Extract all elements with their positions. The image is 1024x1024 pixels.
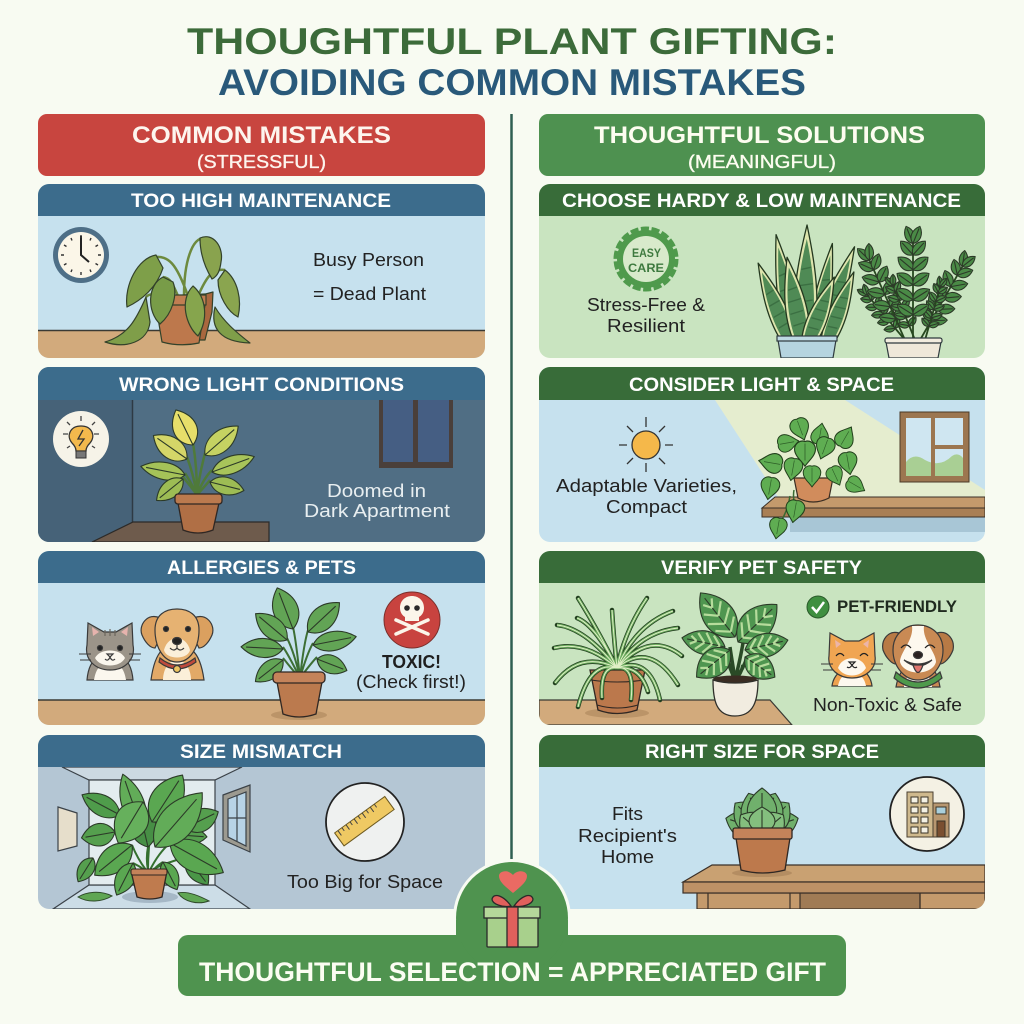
header: choose hardy: CHOOSE HARDY & LOW MAINTENANCE (562, 191, 961, 212)
column header: common mistakes: (STRESSFUL) (197, 152, 326, 172)
header: right size: RIGHT SIZE FOR SPACE (645, 742, 879, 763)
banner text: THOUGHTFUL SELECTION = APPRECIATED GIFT (199, 957, 826, 987)
text: fits recipient's home (578, 804, 677, 867)
illustration: spider plant (554, 598, 682, 718)
header: consider light: CONSIDER LIGHT & SPACE (629, 375, 894, 396)
label: pet-friendly: PET-FRIENDLY (837, 597, 958, 616)
text: fits recipient's home: Home (601, 847, 654, 867)
illustration: prayer plant (680, 583, 791, 716)
text: adaptable varieties (556, 476, 737, 517)
badge: easy care: EASY (632, 246, 661, 260)
text: toxic warning (356, 652, 466, 692)
header: verify pet safety (539, 551, 985, 583)
text: fits recipient's home: Recipient's (578, 826, 677, 846)
text: toxic warning: TOXIC! (382, 652, 441, 672)
text: busy person: = Dead Plant (313, 284, 426, 304)
icon: tan dog (141, 609, 213, 680)
header: allergies and pets: ALLERGIES & PETS (167, 558, 356, 579)
icon: light bulb (53, 411, 109, 467)
window: dark (379, 400, 453, 468)
panel: too high maintenance (38, 184, 485, 358)
text: doomed (304, 481, 450, 521)
column header: common mistakes: COMMON MISTAKES (132, 122, 391, 149)
icon: ruler (326, 783, 404, 861)
header: wrong light conditions: WRONG LIGHT CONDITIONS (119, 375, 404, 396)
illustration: wilted plant (105, 237, 250, 345)
title: THOUGHTFUL PLANT GIFTING: (187, 21, 837, 62)
text: doomed: Dark Apartment (304, 501, 450, 521)
panel: choose hardy and low maintenance (539, 184, 986, 358)
text: stress-free: Resilient (607, 316, 685, 336)
text: stress-free (588, 298, 705, 332)
header: consider light (539, 367, 985, 400)
title: AVOIDING COMMON MISTAKES (218, 62, 806, 103)
text: non-toxic and safe: Non-Toxic & Safe (813, 695, 962, 715)
illustration: pothos (757, 416, 869, 540)
illustration: snake plant (758, 224, 856, 358)
title (187, 21, 837, 103)
icon: clock (53, 227, 109, 283)
table (539, 700, 792, 725)
text: stress-free: Stress-Free & (587, 295, 705, 315)
panel: right size for space (539, 735, 985, 909)
panel: verify pet safety (539, 551, 985, 725)
header: wrong light conditions (38, 367, 485, 400)
room interior (53, 767, 250, 909)
column header: thoughtful solutions (539, 114, 985, 176)
illustration: oversized plant (76, 774, 224, 904)
icon: gift (484, 871, 540, 947)
header: size mismatch (38, 735, 485, 767)
panel: allergies and pets (38, 551, 485, 725)
bottom banner (178, 859, 846, 996)
illustration: succulent (722, 788, 802, 877)
text: too big for space: Too Big for Space (287, 872, 443, 892)
window: bright (900, 412, 969, 482)
header: too high maintenance (38, 184, 485, 216)
text: fits recipient's home: Fits (612, 804, 643, 824)
text: adaptable varieties: Compact (606, 497, 687, 517)
banner badge circle (453, 859, 571, 977)
header: verify pet safety: VERIFY PET SAFETY (661, 558, 862, 579)
center divider (510, 114, 513, 862)
header: allergies and pets (38, 551, 485, 583)
panel: wrong light conditions (38, 367, 485, 542)
icon: apartment building (890, 777, 964, 851)
column header: thoughtful solutions: THOUGHTFUL SOLUTIONS (594, 122, 925, 149)
panel: consider light and space (539, 367, 985, 542)
table: dark (92, 522, 269, 542)
header: right size (539, 735, 985, 767)
text: toxic warning: (Check first!) (356, 672, 466, 692)
text: adaptable varieties: Adaptable Varieties, (556, 476, 737, 496)
icon: skull warning (384, 592, 440, 648)
desk (683, 865, 985, 909)
column header: common mistakes (38, 114, 485, 176)
illustration: yellowing plant (139, 405, 257, 533)
icon: orange cat (821, 633, 883, 686)
text: busy person: Busy Person (313, 250, 424, 270)
illustration: zz plant (856, 226, 976, 358)
header: size mismatch: SIZE MISMATCH (180, 742, 342, 763)
icon: gray cat (79, 623, 141, 680)
illustration: potted plant (241, 583, 358, 720)
shelf (762, 497, 985, 532)
text: doomed: Doomed in (327, 481, 426, 501)
label: pet-friendly (807, 596, 958, 618)
icon: sun (619, 417, 673, 472)
icon: brown dog (883, 625, 953, 688)
header: too high maintenance: TOO HIGH MAINTENANCE (131, 191, 391, 212)
sunbeam (715, 400, 985, 500)
text: busy person (314, 253, 426, 300)
badge: easy care: CARE (628, 261, 664, 275)
panel: size mismatch (38, 735, 485, 909)
badge: easy care (616, 229, 676, 289)
header: choose hardy (539, 184, 985, 216)
column header: thoughtful solutions: (MEANINGFUL) (688, 152, 836, 172)
